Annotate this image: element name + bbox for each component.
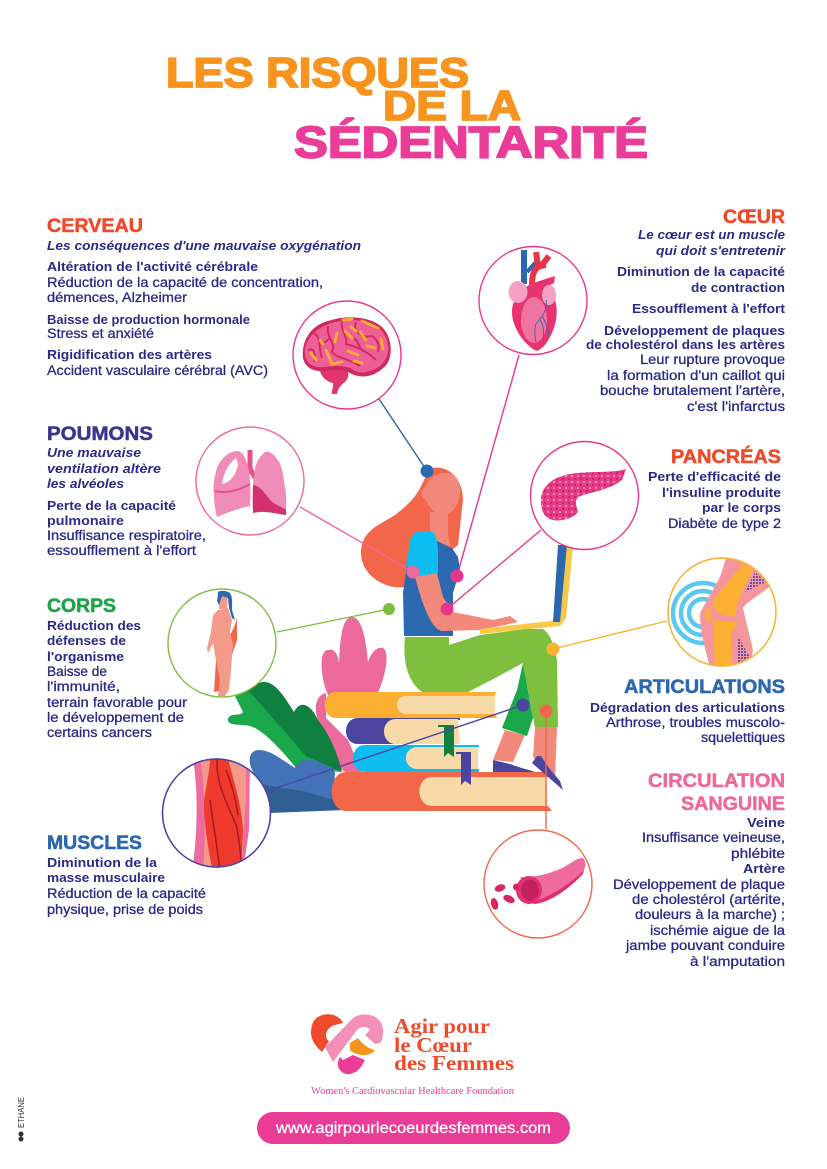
text panel: cerveau <box>47 216 361 378</box>
text panel: muscles: MUSCLES <box>47 833 142 854</box>
title: LES RISQUES <box>166 49 469 96</box>
text panel: articulations: Arthrose, troubles muscolo- <box>606 715 785 730</box>
text panel: muscles: Diminution de la <box>47 855 158 870</box>
woman at laptop <box>361 468 573 790</box>
icon: knee <box>668 555 776 668</box>
icon: muscle <box>162 758 270 872</box>
text panel: cerveau: Rigidification des artères <box>47 347 212 362</box>
text panel: corps: le développement de <box>47 710 184 725</box>
text panel: pancreas <box>648 446 781 531</box>
text panel: circulation sanguine: CIRCULATION <box>648 771 785 792</box>
connector: poumons <box>300 507 420 578</box>
text panel: circulation sanguine: Insuffisance veineuse, <box>642 830 785 845</box>
text panel: poumons: essoufflement à l'effort <box>47 543 196 558</box>
text panel: muscles: Réduction de la capacité <box>47 886 206 901</box>
text panel: muscles: masse musculaire <box>47 870 165 885</box>
text panel: cerveau: Baisse de production hormonale <box>47 312 250 327</box>
logo mark <box>311 1014 383 1074</box>
title: DE LA <box>383 82 521 129</box>
text panel: pancreas: Perte d'efficacité de <box>648 469 781 484</box>
text panel: muscles: physique, prise de poids <box>47 902 203 917</box>
text panel: poumons: POUMONS <box>47 424 153 445</box>
text panel: circulation sanguine: douleurs à la marche) ; <box>635 907 785 922</box>
icon: brain <box>293 301 401 409</box>
text panel: articulations: ARTICULATIONS <box>624 677 785 698</box>
text panel: cerveau: CERVEAU <box>47 216 143 237</box>
logo tagline: Women's Cardiovascular Healthcare Foundation <box>311 1086 514 1097</box>
website pill <box>257 1112 570 1144</box>
stack of books <box>325 692 552 811</box>
text panel: corps: certains cancers <box>47 725 152 740</box>
text panel: coeur: Diminution de la capacité <box>617 264 785 279</box>
text panel: poumons: ventilation altère <box>47 461 161 476</box>
logo wordmark <box>394 1014 514 1075</box>
text panel: corps <box>47 596 188 740</box>
text panel: poumons: Une mauvaise <box>47 445 141 460</box>
connector: circulation <box>540 704 552 829</box>
title <box>166 49 648 168</box>
text panel: pancreas: PANCRÉAS <box>671 446 781 468</box>
text panel: poumons: Insuffisance respiratoire, <box>47 528 206 543</box>
text panel: cerveau: Stress et anxiété <box>47 326 154 341</box>
logo wordmark: des Femmes <box>394 1051 514 1075</box>
logo wordmark: Agir pour <box>394 1014 490 1038</box>
text panel: corps: l'immunité, <box>47 679 120 694</box>
icon: blood vessel <box>484 830 592 938</box>
connector: muscles <box>270 698 530 790</box>
text panel: poumons: Perte de la capacité <box>47 498 176 513</box>
text panel: circulation sanguine: Artère <box>743 861 785 876</box>
text panel: pancreas: l'insuline produite <box>662 485 781 500</box>
credit: ethane <box>17 1097 26 1142</box>
text panel: poumons: les alvéoles <box>47 476 124 491</box>
text panel: articulations: Dégradation des articulations <box>590 700 785 715</box>
bookmarks <box>438 725 471 785</box>
connector: coeur <box>450 355 519 582</box>
text panel: corps: CORPS <box>47 596 116 617</box>
text panel: corps: l'organisme <box>47 649 124 664</box>
icon: pancreas <box>530 442 638 550</box>
text panel: coeur: CŒUR <box>723 207 785 228</box>
icon: heart <box>479 246 587 354</box>
text panel: cerveau: Accident vasculaire cérébral (AVC) <box>47 363 268 378</box>
text panel: coeur: c'est l'infarctus <box>687 399 785 414</box>
text panel: coeur: Le cœur est un muscle <box>638 227 785 242</box>
text panel: circulation sanguine: Veine <box>747 815 785 830</box>
text panel: pancreas: Diabète de type 2 <box>668 516 781 531</box>
text panel: corps: terrain favorable pour <box>47 695 188 710</box>
text panel: articulations: squelettiques <box>701 730 785 745</box>
text panel: coeur: bouche brutalement l'artère, <box>600 383 785 398</box>
text panel: cerveau: Altération de l'activité cérébrale <box>47 259 258 274</box>
text panel: cerveau: démences, Alzheimer <box>47 290 188 305</box>
text panel: coeur: Essoufflement à l'effort <box>632 301 786 316</box>
text panel: coeur: de cholestérol dans les artères <box>586 337 785 352</box>
text panel: muscles <box>47 833 206 917</box>
text panel: poumons <box>47 424 206 558</box>
connector: corps <box>277 603 395 632</box>
text panel: corps: défenses de <box>47 633 126 648</box>
connector: articulations <box>546 621 667 656</box>
text panel: pancreas: par le corps <box>702 500 781 515</box>
text panel: circulation sanguine: SANGUINE <box>681 794 785 815</box>
text panel: coeur: de contraction <box>691 280 785 295</box>
text panel: circulation sanguine: de cholestérol (artérite, <box>632 892 785 907</box>
text panel: circulation sanguine: jambe pouvant conduire <box>625 938 785 953</box>
text panel: poumons: pulmonaire <box>47 513 124 528</box>
text panel: circulation sanguine: à l'amputation <box>690 954 785 969</box>
connector: pancreas <box>440 530 541 616</box>
title: SÉDENTARITÉ <box>294 118 648 168</box>
text panel: circulation sanguine: phlébite <box>731 846 785 861</box>
text panel: coeur: Leur rupture provoque <box>640 352 785 367</box>
text panel: coeur: la formation d'un caillot qui <box>607 368 785 383</box>
text panel: cerveau: Les conséquences d'une mauvaise oxygénation <box>47 238 361 253</box>
logo <box>311 1014 514 1097</box>
text panel: articulations <box>590 677 785 745</box>
text panel: circulation sanguine <box>613 771 786 969</box>
icon: body <box>168 589 276 697</box>
text panel: coeur <box>586 207 786 414</box>
credit: ethane: ETHANE <box>17 1097 26 1128</box>
website pill: www.agirpourlecoeurdesfemmes.com <box>275 1120 551 1137</box>
text panel: corps: Réduction des <box>47 618 141 633</box>
text panel: coeur: Développement de plaques <box>604 323 785 338</box>
text panel: corps: Baisse de <box>47 664 107 679</box>
connector: cerveau <box>379 399 434 478</box>
text panel: cerveau: Réduction de la capacité de concentration, <box>47 275 323 290</box>
text panel: circulation sanguine: Développement de plaque <box>613 877 785 892</box>
logo wordmark: le Cœur <box>394 1033 472 1057</box>
plants <box>228 617 387 813</box>
text panel: coeur: qui doit s'entretenir <box>656 243 786 258</box>
text panel: circulation sanguine: ischémie aigue de la <box>650 923 786 938</box>
icon: lungs <box>196 427 304 535</box>
